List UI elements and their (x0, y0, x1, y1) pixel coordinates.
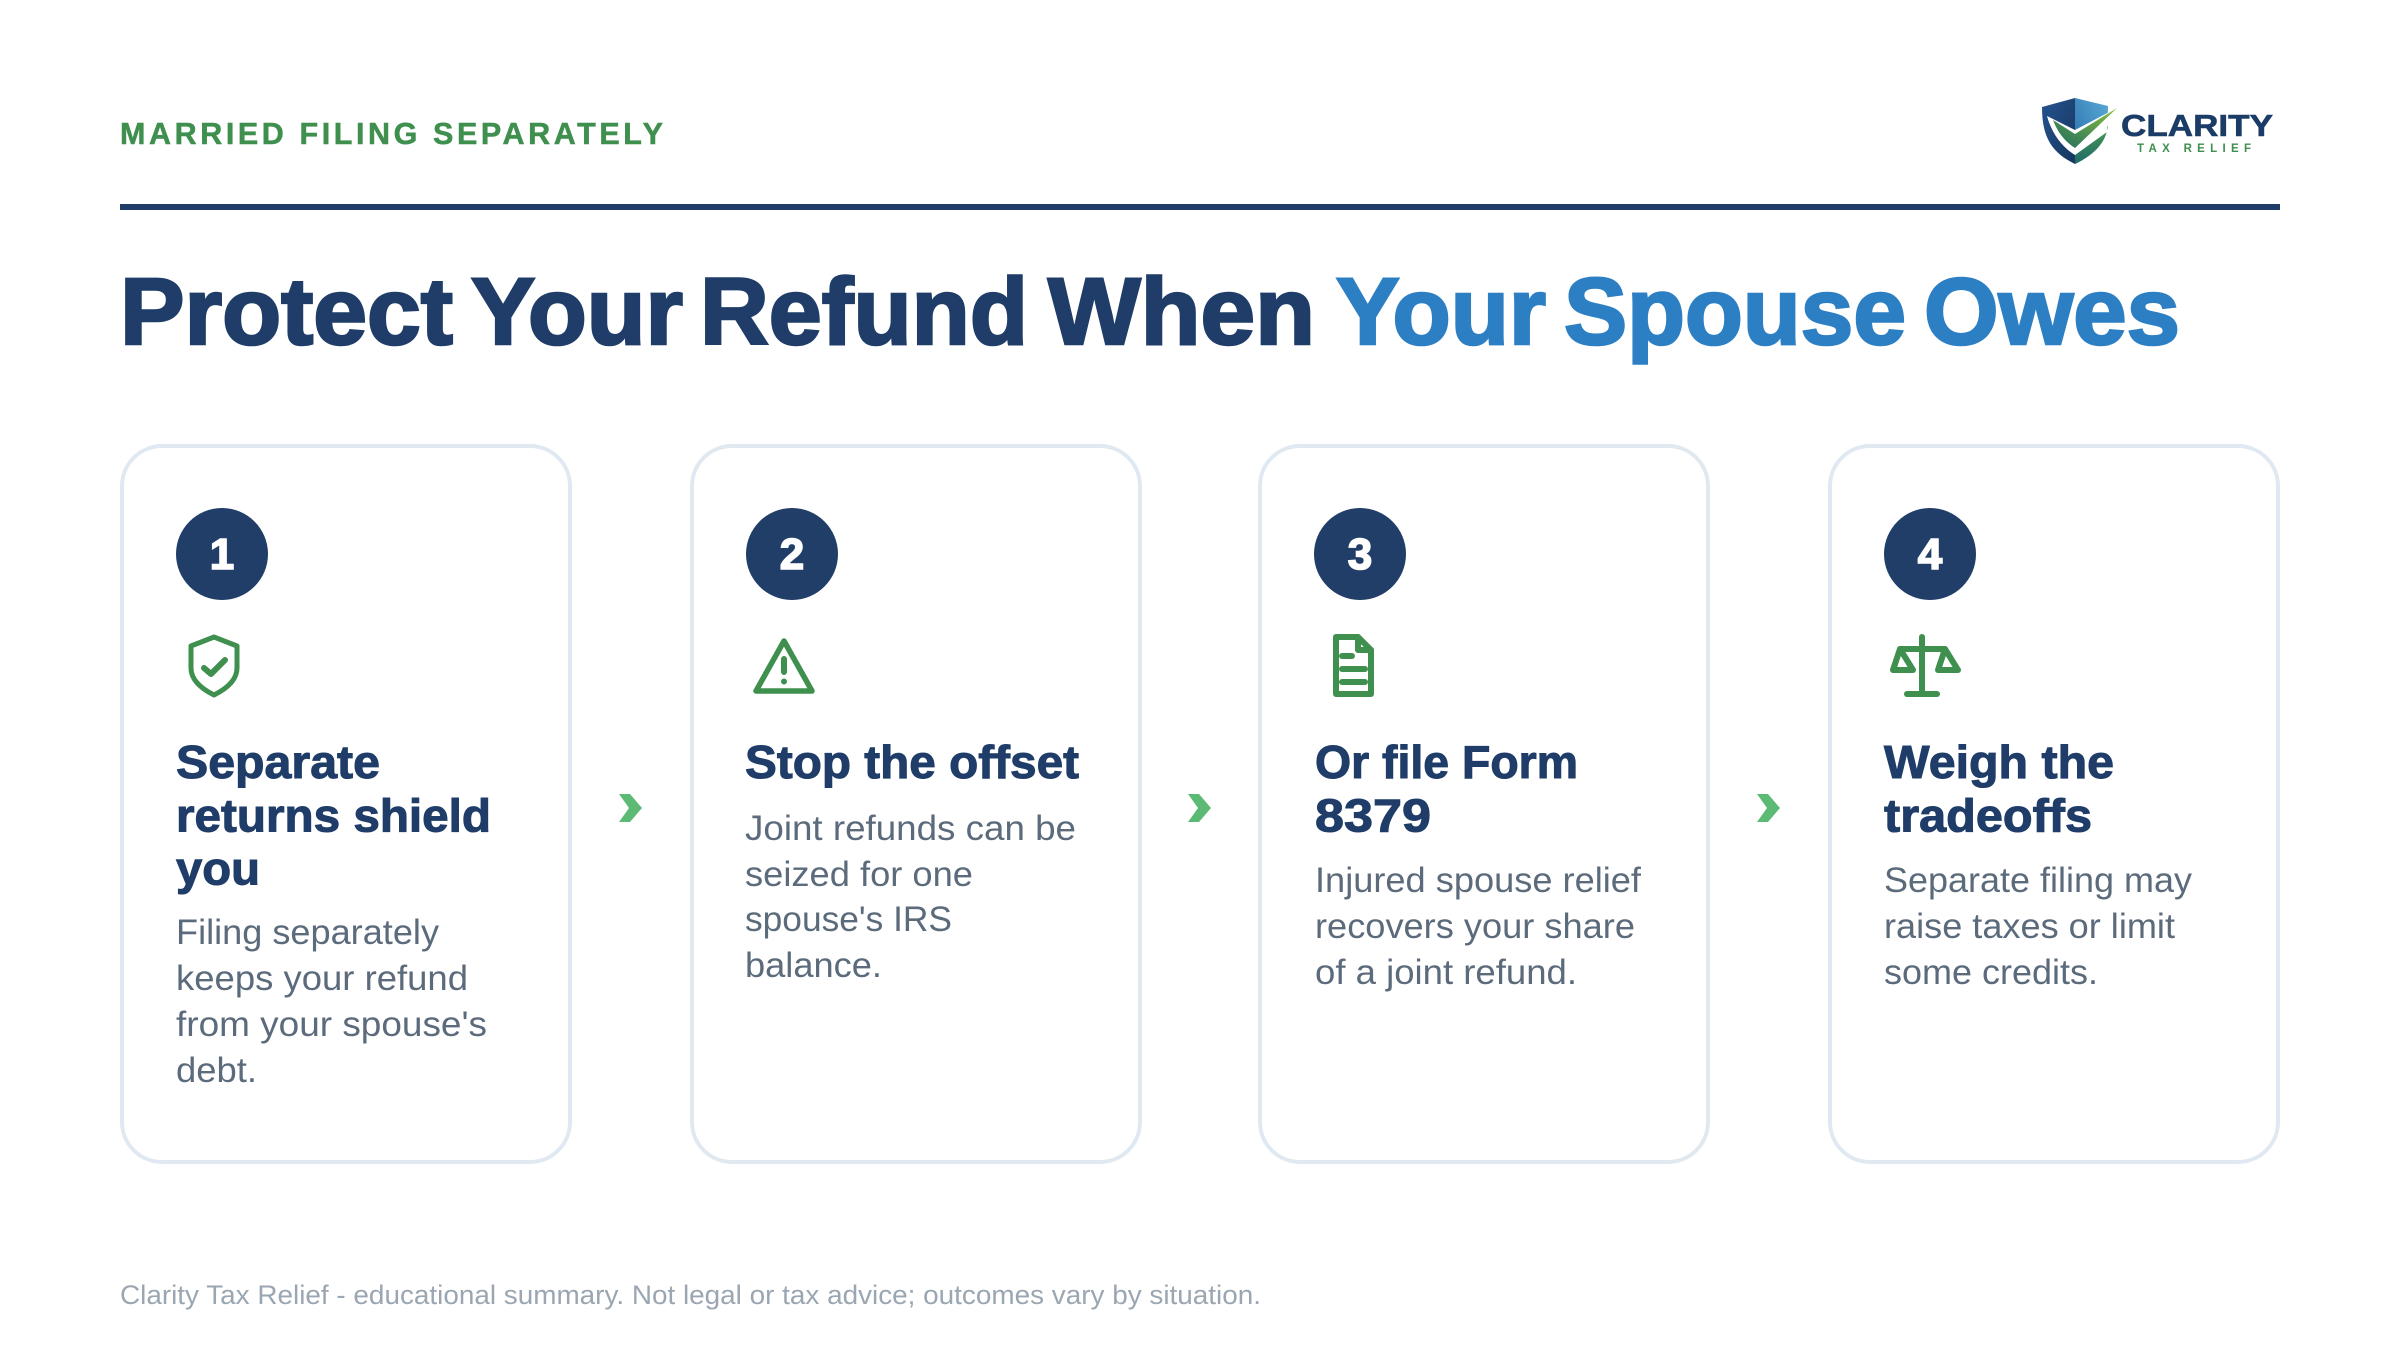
body text: recovers your share (1315, 907, 1635, 946)
header rule (120, 204, 2280, 210)
heading: separate returns shield you (176, 736, 491, 894)
body text: from your spouse's (176, 1005, 487, 1044)
logo wordmark: CLARITY (2121, 108, 2273, 143)
panel: step 2 (692, 446, 1140, 1162)
step number 3 (1314, 508, 1406, 600)
title: When (1048, 259, 1315, 365)
step number 4 (1884, 508, 1976, 600)
body text: some credits. (1884, 953, 2098, 992)
title: Protect (120, 259, 453, 365)
icon: warning triangle (756, 641, 812, 691)
title: Your (471, 259, 683, 365)
title: Your (1336, 259, 1546, 365)
body text: Filing separately (176, 913, 440, 952)
title: Owes (1924, 259, 2180, 365)
arrow 1 to 2 (619, 794, 642, 822)
heading: or file form 8379: Or file Form (1315, 736, 1578, 788)
icon: shield with check (191, 637, 237, 695)
body text: Joint refunds can be (745, 809, 1076, 848)
panel: step 1 (122, 446, 570, 1162)
step number 2: 2 (780, 530, 804, 579)
heading: weigh the tradeoffs: tradeoffs (1884, 790, 2092, 842)
step number 3: 3 (1348, 530, 1372, 579)
logo shield mark (2042, 98, 2117, 164)
heading: or file form 8379 (1315, 736, 1578, 842)
logo: Clarity Tax Relief (2042, 98, 2273, 164)
body text: spouse's IRS (745, 900, 952, 939)
body text (1315, 861, 1641, 992)
step number 2 (746, 508, 838, 600)
panel: step 3 (1260, 446, 1708, 1162)
logo tagline: TAX RELIEF (2137, 143, 2251, 155)
body text: raise taxes or limit (1884, 907, 2175, 946)
body text (176, 913, 487, 1090)
step number 4: 4 (1918, 530, 1943, 579)
heading: separate returns shield you: you (176, 842, 260, 894)
title: Refund (700, 259, 1028, 365)
body text (1884, 861, 2193, 992)
step number 1 (176, 508, 268, 600)
heading: separate returns shield you: Separate (176, 736, 380, 788)
body text: Injured spouse relief (1315, 861, 1641, 900)
title: Spouse (1564, 259, 1906, 365)
heading: separate returns shield you: returns shield (176, 790, 491, 842)
body text: debt. (176, 1051, 257, 1090)
heading: stop the offset: Stop the offset (745, 736, 1079, 788)
arrow 2 to 3 (1188, 794, 1211, 822)
panel: step 4 (1830, 446, 2278, 1162)
icon: document (1336, 637, 1371, 694)
body text: Separate filing may (1884, 861, 2193, 900)
body text: balance. (745, 946, 882, 985)
body text: seized for one (745, 855, 973, 894)
heading: weigh the tradeoffs (1884, 736, 2114, 842)
heading: weigh the tradeoffs: Weigh the (1884, 736, 2114, 788)
eyebrow label: MARRIED FILING SEPARATELY (120, 117, 663, 151)
heading: or file form 8379: 8379 (1315, 790, 1431, 842)
icon: balance scale (1893, 637, 1958, 694)
arrow 3 to 4 (1757, 794, 1780, 822)
footer disclaimer: Clarity Tax Relief - educational summary. Not legal or tax advice; outcomes vary by situation. (120, 1280, 1261, 1310)
body text (745, 809, 1076, 985)
body text: of a joint refund. (1315, 953, 1577, 992)
body text: keeps your refund (176, 959, 468, 998)
title (120, 259, 2180, 365)
step number 1: 1 (210, 530, 234, 579)
